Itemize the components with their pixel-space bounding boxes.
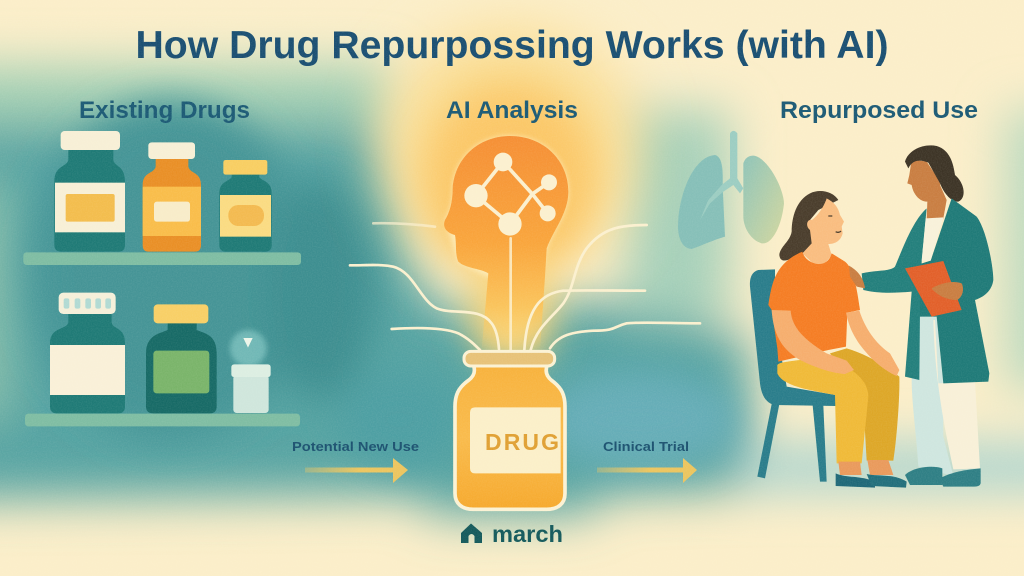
arrow: clinical trial: [597, 458, 697, 483]
doctor hair: [905, 145, 964, 202]
icon: head silhouette: [444, 136, 568, 350]
patient ankles and shoes: [838, 460, 893, 475]
icon: lungs: [678, 131, 784, 249]
doctor trousers: [912, 312, 953, 476]
heading: existing drugs: Existing Drugs: [79, 97, 250, 124]
shelf: bottom: [25, 414, 300, 426]
logo: march: march: [492, 521, 563, 547]
doctor coat: [912, 198, 993, 383]
bottle: large teal with dotted cap: [50, 293, 125, 413]
bottle: large teal with cream label: [54, 131, 125, 252]
doctor hands: [932, 282, 963, 300]
panel: medicine shelves: [23, 131, 301, 426]
icon: drug jar: [455, 351, 565, 509]
patient pants: [830, 348, 899, 461]
heading: AI analysis: AI Analysis: [446, 97, 578, 124]
title: How Drug Repurpossing Works (with AI): [136, 24, 888, 67]
bottle: dark teal with green label: [146, 304, 217, 413]
doctor clipboard: [905, 261, 962, 317]
patient arms: [772, 310, 854, 374]
data streams: [350, 223, 700, 350]
shelf: top: [23, 252, 301, 265]
figure: chair: [750, 269, 836, 482]
jar label text: DRUG: [485, 429, 559, 455]
bottle: tiny vial with glow: [230, 330, 271, 413]
arrow: potential new use: [305, 458, 408, 483]
label: potential new use: Potential New Use: [292, 440, 419, 454]
label: clinical trial: Clinical Trial: [603, 440, 689, 454]
bottle: small teal with yellow label: [219, 160, 272, 252]
figure: doctor: [849, 145, 993, 487]
panel: repurposed use scene: [678, 131, 993, 488]
bottle: orange: [143, 142, 201, 252]
figure: patient: [768, 191, 907, 488]
doctor shirt: [922, 217, 943, 261]
patient hair: [779, 191, 838, 261]
icon: molecule network: [464, 153, 557, 236]
head glow: [445, 136, 568, 277]
doctor neck and face: [907, 159, 947, 220]
patient face and neck: [802, 198, 844, 270]
icon: house: [461, 524, 482, 543]
patient shirt: [768, 252, 860, 362]
doctor shoes: [905, 467, 942, 485]
logo: march: [461, 521, 563, 547]
heading: repurposed use: Repurposed Use: [780, 97, 978, 124]
panel: AI head and drug jar: [350, 136, 700, 509]
